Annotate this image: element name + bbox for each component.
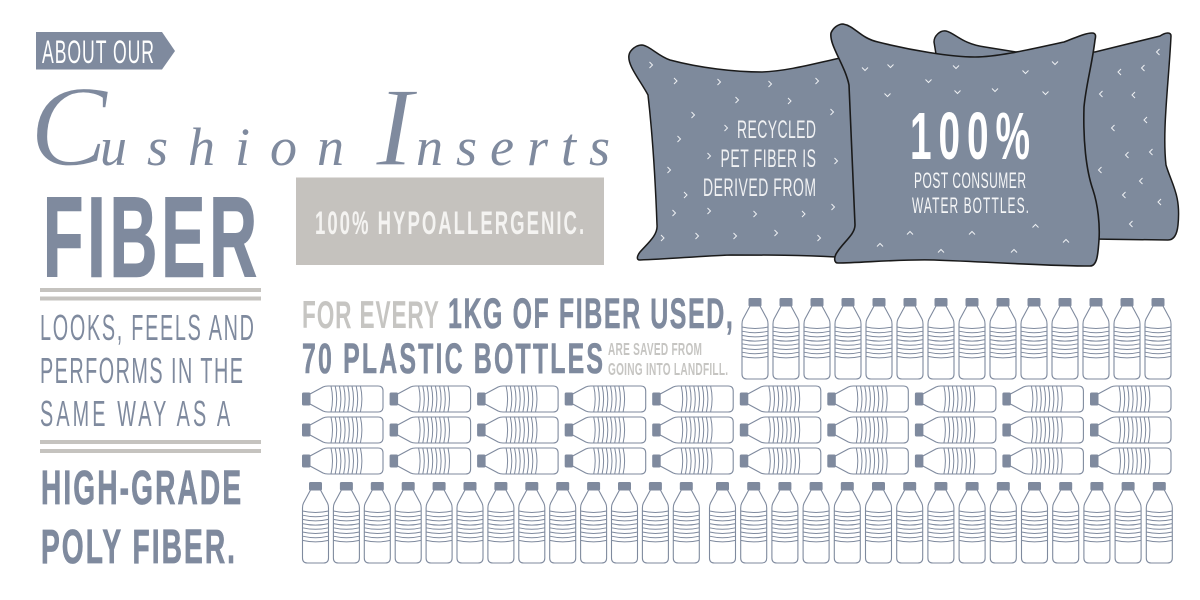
heading: for every 1kg of fiber used: GOING INTO LANDFILL. bbox=[608, 360, 728, 380]
divider: upper double rule bbox=[40, 288, 261, 300]
bottles: horizontal row 1 bbox=[302, 386, 1171, 412]
text block: high-grade poly fiber bbox=[41, 461, 241, 574]
text: post consumer water bottles: WATER BOTTLES. bbox=[912, 193, 1029, 218]
title: cushion inserts: nserts bbox=[416, 117, 623, 177]
bottles: horizontal row 3 bbox=[302, 448, 1171, 474]
text block: looks, feels and performs bbox=[40, 309, 254, 435]
divider: lower double rule bbox=[40, 440, 261, 453]
text block: looks, feels and performs: LOOKS, FEELS AND bbox=[40, 309, 254, 349]
title: cushion inserts: ushion bbox=[100, 117, 364, 177]
heading: for every 1kg of fiber used bbox=[302, 290, 733, 383]
cushion: right bbox=[934, 31, 1179, 240]
heading: fiber: FIBER bbox=[43, 174, 257, 301]
text: recycled pet fiber: DERIVED FROM bbox=[703, 174, 816, 202]
text block: looks, feels and performs: SAME WAY AS A bbox=[40, 395, 230, 435]
text: post consumer water bottles: POST CONSUMER bbox=[914, 168, 1026, 193]
text block: high-grade poly fiber: POLY FIBER. bbox=[41, 520, 235, 574]
bottles: bottom row bbox=[302, 482, 1172, 563]
cushion: centre bbox=[831, 24, 1099, 266]
cushion: left bbox=[629, 45, 900, 260]
stat: 100%: 100% bbox=[910, 98, 1030, 174]
text: recycled pet fiber: PET FIBER IS bbox=[720, 145, 816, 173]
callout: 100% hypoallergenic bbox=[296, 178, 604, 265]
text block: looks, feels and performs: PERFORMS IN THE bbox=[40, 352, 243, 392]
callout: 100% hypoallergenic: 100% HYPOALLERGENIC. bbox=[315, 205, 584, 241]
text block: high-grade poly fiber: HIGH-GRADE bbox=[41, 461, 241, 515]
title: cushion inserts: C bbox=[30, 63, 109, 191]
tag: about our: ABOUT OUR bbox=[42, 36, 154, 70]
heading: for every 1kg of fiber used: 1KG OF FIBER USED, bbox=[448, 290, 733, 338]
heading: for every 1kg of fiber used: FOR EVERY bbox=[302, 293, 439, 337]
bottles: horizontal row 2 bbox=[302, 417, 1171, 443]
text: recycled pet fiber: RECYCLED bbox=[737, 116, 816, 144]
bottles: top row bbox=[742, 298, 1171, 379]
text: post consumer water bottles bbox=[912, 168, 1029, 218]
title: cushion inserts: I bbox=[375, 66, 418, 190]
heading: for every 1kg of fiber used: 70 PLASTIC BOTTLES bbox=[302, 335, 603, 383]
illustration: three cushions bbox=[629, 24, 1179, 266]
heading: for every 1kg of fiber used: ARE SAVED FROM bbox=[608, 340, 702, 360]
text: recycled pet fiber bbox=[703, 116, 816, 202]
